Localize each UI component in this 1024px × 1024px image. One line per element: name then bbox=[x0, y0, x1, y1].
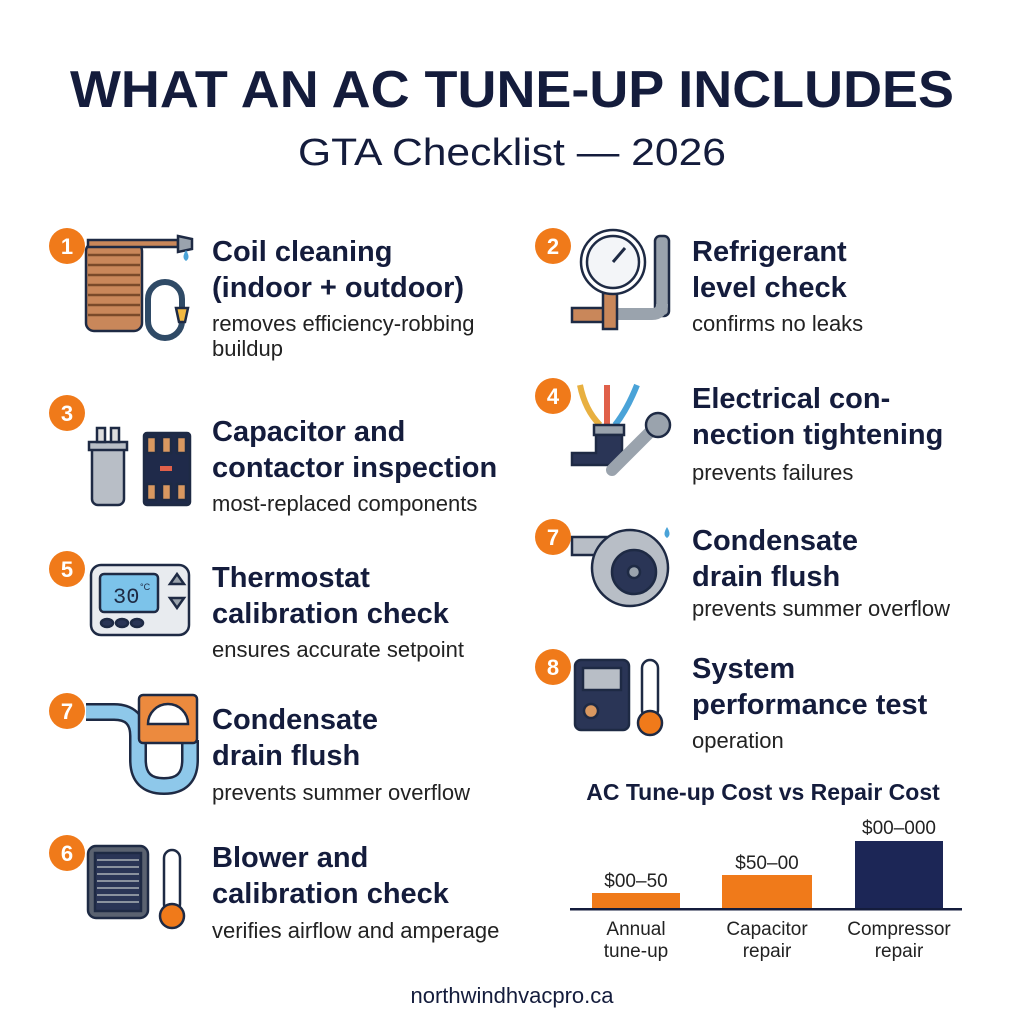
icon: gauge bbox=[572, 230, 669, 329]
bar chart: tune-up vs repair cost: $00–000 bbox=[862, 818, 936, 839]
text 1: Coil cleaning bbox=[212, 236, 392, 268]
bar chart: tune-up vs repair cost: Compressor bbox=[847, 919, 951, 940]
text 6: calibration check bbox=[212, 878, 450, 910]
text 7 right: prevents summer overflow bbox=[692, 596, 950, 621]
icon: blower unit and thermometer bbox=[88, 846, 184, 928]
text 3: Capacitor and bbox=[212, 416, 405, 448]
badge 4: 4 bbox=[547, 384, 560, 409]
badge 4 bbox=[535, 378, 571, 414]
item 4: electrical bbox=[535, 378, 943, 485]
text 7 left: prevents summer overflow bbox=[212, 780, 470, 805]
icon: wires and wrench bbox=[572, 385, 670, 470]
badge 1 bbox=[49, 228, 85, 264]
title: WHAT AN AC TUNE-UP INCLUDES bbox=[70, 61, 954, 119]
text 5: ensures accurate setpoint bbox=[212, 637, 464, 662]
text 8: performance test bbox=[692, 689, 928, 721]
text 8 bbox=[692, 653, 928, 753]
text 4 bbox=[692, 383, 943, 485]
text 5: calibration check bbox=[212, 598, 450, 630]
text 4: prevents failures bbox=[692, 460, 853, 485]
text 5: Thermostat bbox=[212, 562, 370, 594]
badge 7 left bbox=[49, 693, 85, 729]
badge 8 bbox=[535, 649, 571, 685]
text 5 bbox=[212, 562, 464, 662]
item 5: thermostat: 30 bbox=[113, 585, 139, 610]
badge 2: 2 bbox=[547, 234, 559, 259]
text 8: operation bbox=[692, 728, 784, 753]
text 3 bbox=[212, 416, 497, 516]
item 2: refrigerant bbox=[535, 228, 863, 336]
text 6: verifies airflow and amperage bbox=[212, 918, 499, 943]
badge 2 bbox=[535, 228, 571, 264]
badge 7 right: 7 bbox=[547, 525, 559, 550]
icon: drain pipe with gauge bbox=[86, 695, 197, 786]
badge 8: 8 bbox=[547, 655, 559, 680]
subtitle: GTA Checklist — 2026 bbox=[298, 132, 726, 174]
text 1 bbox=[212, 236, 474, 361]
item 7 left: condensate bbox=[49, 693, 470, 805]
item 5: thermostat bbox=[49, 551, 464, 662]
text 6 bbox=[212, 842, 499, 943]
item 5: thermostat: °C bbox=[140, 582, 151, 592]
badge 6 bbox=[49, 835, 85, 871]
text 1: removes efficiency-robbing bbox=[212, 311, 474, 336]
text 8: System bbox=[692, 653, 795, 685]
badge 7 right bbox=[535, 519, 571, 555]
text 1: (indoor + outdoor) bbox=[212, 272, 464, 304]
text 3: contactor inspection bbox=[212, 452, 497, 484]
text 7 left bbox=[212, 704, 470, 805]
badge 1: 1 bbox=[61, 234, 73, 259]
text 4: nection tightening bbox=[692, 419, 943, 451]
badge 3 bbox=[49, 395, 85, 431]
text 2: Refrigerant bbox=[692, 236, 847, 268]
text 7 right: Condensate bbox=[692, 525, 858, 557]
bar chart: tune-up vs repair cost bbox=[570, 779, 962, 962]
footer url: northwindhvacpro.ca bbox=[410, 983, 614, 1008]
text 2: level check bbox=[692, 272, 848, 304]
text 2 bbox=[692, 236, 863, 336]
badge 6: 6 bbox=[61, 841, 73, 866]
text 7 right bbox=[692, 525, 950, 621]
text 2: confirms no leaks bbox=[692, 311, 863, 336]
badge 7 left: 7 bbox=[61, 699, 73, 724]
text 7 left: drain flush bbox=[212, 740, 360, 772]
bar chart: tune-up vs repair cost: repair bbox=[875, 941, 924, 962]
bar chart: tune-up vs repair cost: Annual bbox=[606, 919, 666, 940]
bar chart: tune-up vs repair cost: Capacitor bbox=[726, 919, 808, 940]
chart title: AC Tune-up Cost vs Repair Cost bbox=[586, 779, 940, 805]
badge 5: 5 bbox=[61, 557, 73, 582]
icon: coil bbox=[86, 236, 192, 338]
bar chart: tune-up vs repair cost: tune-up bbox=[604, 941, 668, 962]
text 7 right: drain flush bbox=[692, 561, 840, 593]
text 3: most-replaced components bbox=[212, 491, 477, 516]
bar chart: tune-up vs repair cost: $50–00 bbox=[735, 853, 799, 874]
item 8: system test bbox=[535, 649, 928, 753]
text 1: buildup bbox=[212, 336, 283, 361]
badge 5 bbox=[49, 551, 85, 587]
icon: water drop bbox=[184, 250, 188, 261]
text 4: Electrical con- bbox=[692, 383, 890, 415]
text 7 left: Condensate bbox=[212, 704, 378, 736]
text 6: Blower and bbox=[212, 842, 368, 874]
badge 3: 3 bbox=[61, 401, 73, 426]
item 7 right: condensate bbox=[535, 519, 950, 621]
item 3: capacitor bbox=[49, 395, 497, 516]
icon: thermostat bbox=[91, 565, 189, 635]
icon: unit and thermometer bbox=[575, 660, 662, 735]
icon: capacitor and contactor bbox=[89, 428, 190, 505]
bar chart: tune-up vs repair cost: $00–50 bbox=[604, 871, 668, 892]
item 1: coil cleaning bbox=[49, 228, 474, 361]
icon: blower bbox=[572, 530, 668, 606]
bar chart: tune-up vs repair cost: repair bbox=[743, 941, 792, 962]
item 6: blower bbox=[49, 835, 499, 943]
